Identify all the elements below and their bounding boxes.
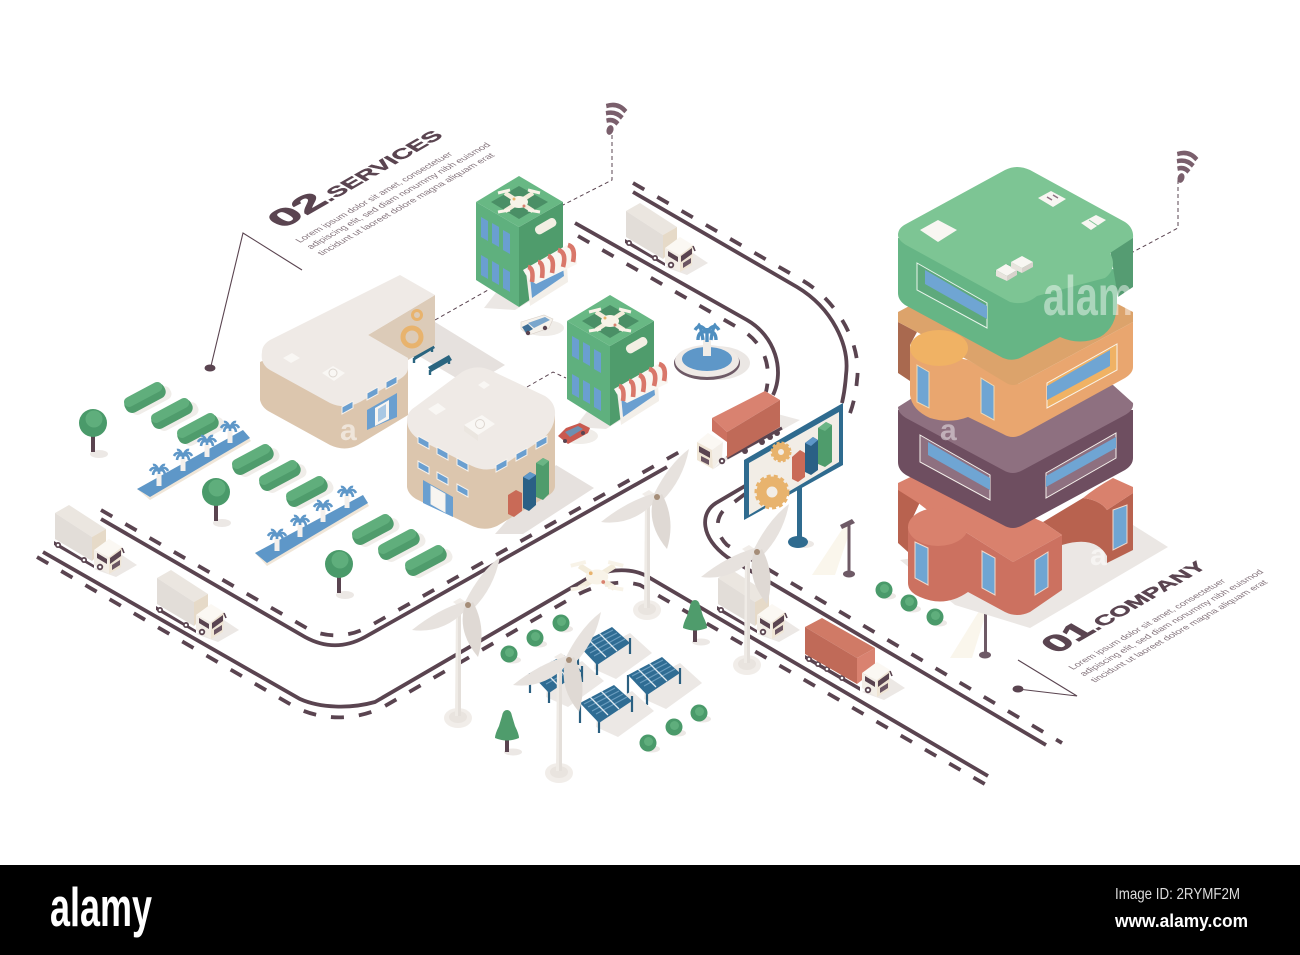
- road network: [37, 183, 1062, 787]
- solar panel: back left: [530, 655, 604, 707]
- wind turbine: left: [412, 557, 500, 728]
- car: red: [558, 423, 598, 444]
- road: lower highway: [37, 552, 990, 787]
- footer logo: alamy: [50, 876, 152, 938]
- roof: [407, 367, 555, 470]
- callout pointer: [204, 233, 302, 372]
- road: outer curve to company: [633, 183, 1062, 745]
- roof: [262, 275, 435, 406]
- fountain: [674, 324, 750, 380]
- car: white van: [521, 315, 564, 336]
- gears: [756, 442, 790, 508]
- connector: beige to green building: [435, 290, 488, 320]
- screen bars: [792, 422, 832, 482]
- footer image id: Image ID: 2RYMF2M: [1115, 886, 1240, 903]
- heading: 02.services: [258, 121, 450, 233]
- windows and door: [418, 436, 547, 517]
- building: beige service centre: [260, 275, 505, 448]
- truck: red lower: [805, 618, 905, 700]
- heading: 01.company: .COMPANY: [1083, 559, 1212, 634]
- wind turbine: right: [701, 504, 789, 675]
- shadow: [900, 525, 1168, 628]
- company tower: [898, 167, 1168, 628]
- watermark: alam: [1043, 264, 1133, 327]
- watermark: a: [1090, 539, 1107, 572]
- icon: wifi services: [599, 103, 627, 138]
- frame: [744, 403, 843, 520]
- pool with palms: upper: [137, 422, 251, 500]
- floor: purple: [898, 385, 1133, 528]
- round shrubs near panels: [500, 614, 711, 752]
- callout pointer: [1012, 660, 1077, 696]
- landscaping: hedges: [121, 378, 455, 582]
- solar panel: back right: [578, 627, 652, 679]
- floor: orange: [898, 250, 1133, 437]
- connector: wifi to company tower: [1133, 180, 1178, 252]
- trees: [79, 409, 354, 599]
- shadow and benches: [400, 322, 505, 386]
- pole: [788, 485, 814, 548]
- building: green shop top: [476, 176, 577, 310]
- heading: 01.company: [1032, 552, 1214, 658]
- shadow: [495, 465, 594, 534]
- connector: second beige to green building: [527, 372, 566, 387]
- truck: white left upper: [54, 505, 137, 577]
- icon: wifi company: [1170, 151, 1198, 186]
- wind turbine: front: [513, 612, 601, 783]
- watermark: a: [340, 414, 357, 447]
- floor: green: [898, 167, 1133, 360]
- footer url: www.alamy.com: [1114, 911, 1248, 931]
- callout: 02 services: [204, 121, 504, 372]
- building: green shop lower: [567, 295, 668, 429]
- text block: company description: Lorem ipsum dolor sit amet, consectetuer: [1066, 577, 1228, 671]
- screen: [749, 412, 839, 515]
- watermark: a: [940, 414, 957, 447]
- callout: 01 company: [1012, 552, 1277, 696]
- truck: white left lower: [156, 570, 239, 642]
- text block: company description: tincidunt ut laoreet dolore magna aliquam erat: [1088, 578, 1270, 684]
- wind turbine: centre: [601, 449, 689, 620]
- road: services loop: [101, 223, 778, 645]
- billboard: [744, 403, 843, 548]
- floor: red: [898, 470, 1133, 615]
- pool with palms: lower: [255, 487, 369, 566]
- roof units: [920, 191, 1106, 281]
- lamp: near tower upper: [812, 519, 855, 578]
- heading: 02.services: 02: [258, 187, 336, 233]
- heading: 02.services: .SERVICES: [316, 128, 448, 205]
- rear wall with gear: [368, 295, 435, 360]
- truck: white right: [717, 570, 800, 642]
- text block: services description: adipiscing elit, sed diam nonummy nibh euismod: [304, 141, 493, 250]
- text block: services description: Lorem ipsum dolor sit amet, consectetuer: [293, 150, 455, 244]
- truck: red centre: [697, 391, 800, 470]
- solar panel: front left: [580, 685, 654, 737]
- footer bar: [0, 865, 1300, 955]
- walls: [407, 380, 555, 529]
- text block: company description: adipiscing elit, sed diam nonummy nibh euismod: [1077, 568, 1266, 677]
- heading: 01.company: 01: [1032, 616, 1103, 658]
- drone over road: [571, 562, 623, 590]
- walls: [260, 330, 408, 448]
- rooftop unit: [428, 381, 495, 441]
- truck: white top: [625, 203, 708, 275]
- bar chart: [508, 458, 549, 517]
- text block: services description: tincidunt ut laoreet dolore magna aliquam erat: [315, 151, 497, 257]
- windows and door: [342, 376, 397, 430]
- rooftop units: [283, 353, 345, 381]
- lamp: near tower lower: [950, 601, 991, 658]
- round shrubs near tower: [876, 582, 947, 626]
- connector: wifi to green building: [563, 135, 612, 205]
- conifer trees: [495, 600, 710, 756]
- window: [917, 263, 987, 328]
- watermark: [340, 264, 1133, 572]
- solar panel: front right: [628, 657, 702, 709]
- building: beige office: [407, 367, 594, 534]
